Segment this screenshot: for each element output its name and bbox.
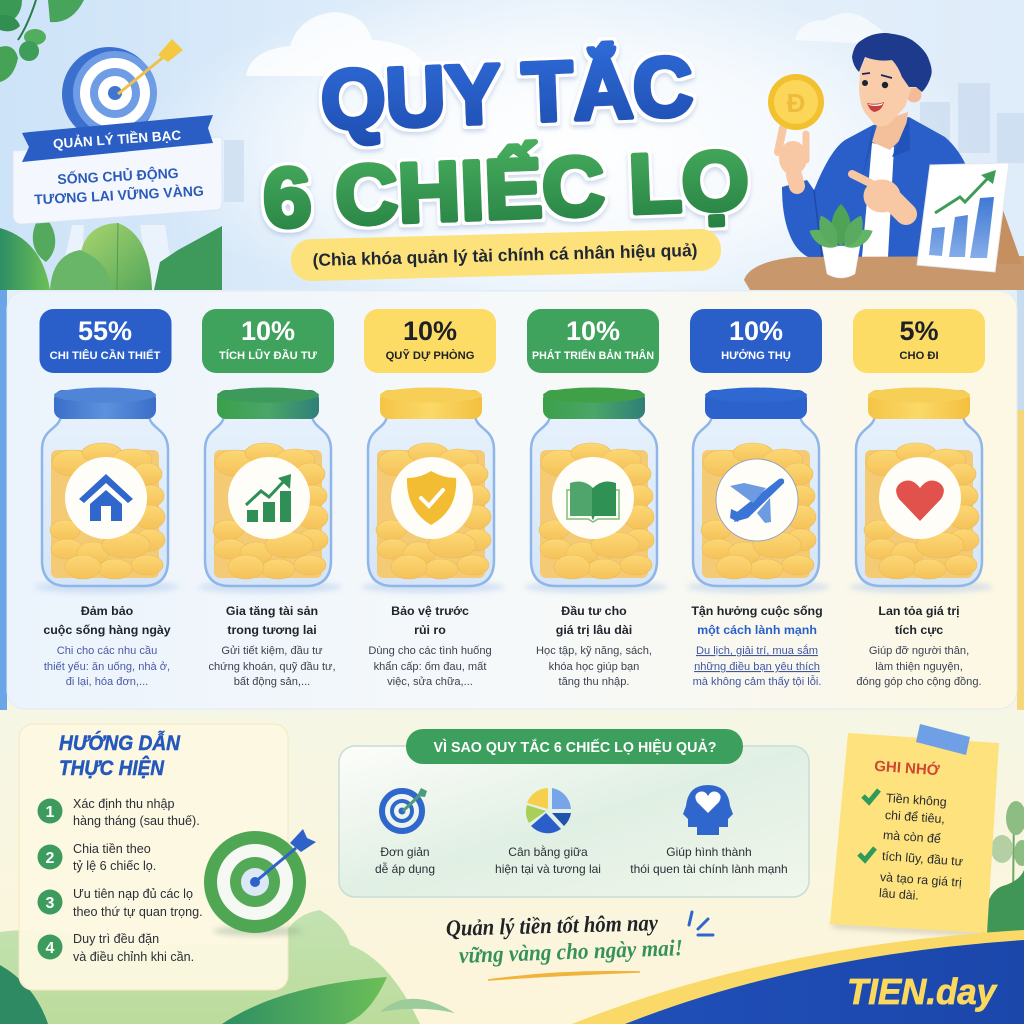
ear — [906, 88, 922, 102]
step 1: Xác định thu nhập — [73, 797, 175, 811]
step 4: Duy trì đều đặn — [73, 932, 159, 946]
icon: open book — [567, 481, 619, 522]
guide heading — [59, 731, 181, 780]
footer band — [572, 930, 1024, 1024]
icon: bar chart with arrow — [246, 474, 291, 522]
white sign — [13, 137, 222, 224]
jar 5: plane — [686, 388, 830, 593]
text column 2: chứng khoán, quỹ đầu tư, — [208, 661, 336, 673]
brand: TIEN.day — [847, 971, 998, 1012]
text column 1: đi lại, hóa đơn,... — [66, 676, 148, 688]
title line 1: QUY TẮC — [319, 39, 695, 147]
text column 3: Bảo vệ trước — [391, 604, 469, 618]
why heading pill: VÌ SAO QUY TẮC 6 CHIẾC LỌ HIỆU QUẢ? — [434, 738, 717, 756]
benefit 1 — [375, 845, 435, 876]
check marks — [859, 790, 879, 860]
guide heading: THỰC HIỆN — [59, 756, 165, 780]
step 4 — [38, 932, 194, 964]
badge: 10% reserve: 10% — [403, 316, 457, 346]
step 3: 3 — [46, 895, 55, 912]
sign text: motto: SỐNG CHỦ ĐỘNG — [57, 164, 179, 187]
eyebrows and eyes — [862, 73, 892, 78]
title line 2: 6 CHIẾC LỌ — [261, 133, 751, 245]
text column 2 — [208, 604, 336, 688]
jar 1: house — [35, 388, 179, 593]
face — [859, 52, 911, 126]
text column 6: làm thiện nguyện, — [875, 661, 963, 673]
step 3: theo thứ tự quan trọng. — [73, 905, 203, 919]
text column 5: Du lịch, giải trí, mua sắm — [696, 644, 818, 657]
left hand holding coin — [778, 128, 806, 186]
collar — [862, 117, 910, 178]
man with coin: Đ — [787, 88, 805, 118]
text column 4 — [536, 604, 652, 688]
note text: Tiền không — [886, 791, 947, 809]
text column 1: cuộc sống hàng ngày — [43, 623, 171, 637]
top-left branch leaves — [0, 0, 84, 82]
text column 5: một cách lành mạnh — [697, 623, 817, 637]
potted plant — [806, 204, 876, 278]
blue ribbon — [22, 115, 213, 162]
note text: chi để tiêu, — [885, 808, 945, 826]
benefit 2: Cân bằng giữa — [508, 844, 588, 859]
text column 4: Đầu tư cho — [561, 604, 627, 618]
sign text: motto — [34, 164, 204, 207]
main panel — [7, 291, 1017, 709]
bottom hills — [0, 910, 455, 1024]
subtitle pill — [291, 228, 721, 282]
text column 3: Dùng cho các tình huống — [368, 645, 492, 657]
text column 5 — [691, 604, 823, 688]
text column 3: việc, sửa chữa,... — [387, 676, 473, 688]
icon: target — [382, 788, 427, 831]
icon: shield — [407, 471, 456, 525]
why heading pill — [406, 729, 743, 764]
jacket — [782, 117, 968, 257]
text column 4: giá trị lâu dài — [556, 623, 632, 637]
benefit 2: hiện tại và tương lai — [495, 862, 601, 876]
benefit 2 — [495, 844, 601, 876]
step 2: Chia tiền theo — [73, 842, 151, 856]
note text: mà còn để — [883, 828, 941, 846]
badge: 55%: CHI TIÊU CẦN THIẾT — [50, 349, 160, 362]
badge: 10% self development: PHÁT TRIỂN BẢN THÂN — [532, 349, 654, 362]
sticky note — [830, 724, 999, 937]
guide panel — [19, 724, 288, 990]
handwritten slogan: Quản lý tiền tốt hôm nay — [446, 910, 659, 941]
table — [744, 256, 1024, 290]
text column 5: mà không cảm thấy tội lỗi. — [693, 675, 821, 688]
hair — [852, 33, 932, 92]
badge: 10% self development: 10% — [566, 316, 620, 346]
shirt — [862, 143, 894, 257]
gold coin — [768, 74, 824, 130]
note text: lâu dài. — [879, 886, 919, 903]
icon: house — [79, 474, 133, 521]
handwritten slogan — [446, 910, 713, 980]
step 4: 4 — [46, 940, 55, 957]
note heading: GHI NHỚ — [874, 757, 940, 779]
benefit 1: Đơn giản — [380, 845, 430, 859]
badge: 10% enjoy — [690, 309, 822, 373]
neck — [872, 112, 908, 150]
right hand pointing — [852, 174, 906, 214]
text column 5: Tận hưởng cuộc sống — [691, 604, 823, 618]
text column 4: khóa học giúp bạn — [549, 661, 639, 673]
badge: 5% giving: CHO ĐI — [899, 350, 939, 362]
badge: 10% accumulate: 10% — [241, 316, 295, 346]
text column 6: Giúp đỡ người thân, — [869, 645, 969, 657]
text column 2: Gia tăng tài sản — [226, 604, 318, 618]
jar 2: growth — [198, 388, 342, 593]
icon: heart — [896, 480, 944, 521]
text column 1: thiết yếu: ăn uống, nhà ở, — [44, 661, 170, 673]
benefit 3: Giúp hình thành — [666, 845, 752, 859]
badge: 55%: 55% — [78, 316, 132, 346]
badge: 5% giving: 5% — [899, 316, 939, 346]
text column 4: Học tập, kỹ năng, sách, — [536, 645, 652, 657]
blue ribbon: QUẢN LÝ TIỀN BẠC — [53, 128, 182, 151]
icon: head with heart — [683, 785, 733, 835]
guide heading: HƯỚNG DẪN — [59, 731, 181, 755]
right plant — [982, 801, 1024, 935]
badge: 10% reserve — [364, 309, 496, 373]
badge: 10% enjoy: 10% — [729, 316, 783, 346]
benefit 1: dễ áp dụng — [375, 861, 435, 876]
leaves under the sign — [0, 213, 222, 290]
title — [261, 39, 751, 245]
step 2: 2 — [46, 850, 55, 867]
text column 2: bất động sản,... — [234, 676, 310, 688]
badge: 10% self development — [527, 309, 659, 373]
benefit 3: thói quen tài chính lành mạnh — [630, 862, 788, 876]
step 1: hàng tháng (sau thuế). — [73, 814, 200, 828]
why panel — [339, 729, 809, 897]
text column 3: rủi ro — [414, 623, 446, 637]
jar 4: book — [524, 388, 668, 593]
badge: 10% accumulate: TÍCH LŨY ĐẦU TƯ — [219, 349, 318, 362]
subtitle pill: (Chìa khóa quản lý tài chính cá nhân hiệu quả) — [312, 240, 698, 270]
jar 3: shield — [361, 388, 505, 593]
text column 2: Gửi tiết kiệm, đầu tư — [221, 645, 323, 657]
text column 6: tích cực — [895, 623, 943, 637]
badge: 10% enjoy: HƯỞNG THỤ — [721, 349, 791, 362]
text column 1: Đảm bảo — [81, 604, 134, 618]
tape — [916, 724, 970, 755]
note text: tích lũy, đầu tư — [882, 849, 963, 869]
text column 6 — [856, 604, 982, 688]
icon: plane — [730, 478, 784, 523]
text column 1 — [43, 604, 171, 688]
blue target with arrow — [58, 39, 183, 290]
step 2: tỷ lệ 6 chiếc lọ. — [73, 859, 156, 873]
icon: pie chart — [526, 788, 571, 833]
sign text: motto: TƯƠNG LAI VỮNG VÀNG — [34, 182, 204, 207]
benefit 3 — [630, 845, 788, 876]
text column 2: trong tương lai — [227, 623, 317, 637]
step 4: và điều chỉnh khi cần. — [73, 950, 194, 964]
man with coin — [768, 33, 968, 257]
smile — [867, 102, 884, 112]
text column 6: Lan tỏa giá trị — [878, 604, 960, 618]
text column 3 — [368, 604, 492, 688]
step 1 — [38, 797, 200, 828]
growth chart board — [917, 163, 1022, 272]
badge: 55% — [40, 309, 172, 373]
text column 5: những điều bạn yêu thích — [694, 661, 820, 673]
text column 6: đóng góp cho cộng đồng. — [856, 676, 982, 688]
step 2 — [38, 842, 156, 873]
badge: 10% reserve: QUỸ DỰ PHÒNG — [386, 349, 475, 362]
step 3: Ưu tiên nạp đủ các lọ — [73, 887, 193, 901]
jar 6: heart — [849, 388, 993, 593]
text column 3: khẩn cấp: ốm đau, mất — [374, 661, 486, 673]
step 3 — [38, 887, 203, 919]
badge: 5% giving — [853, 309, 985, 373]
step 1: 1 — [46, 804, 55, 821]
note text — [879, 791, 963, 903]
handwritten slogan: vững vàng cho ngày mai! — [459, 935, 683, 968]
text column 1: Chi cho các nhu cầu — [57, 645, 157, 657]
badge: 10% accumulate — [202, 309, 334, 373]
text column 4: tăng thu nhập. — [559, 676, 629, 688]
green target with blue arrow — [204, 829, 316, 936]
note text: và tạo ra giá trị — [880, 870, 962, 890]
clouds and skyline — [224, 12, 1024, 202]
